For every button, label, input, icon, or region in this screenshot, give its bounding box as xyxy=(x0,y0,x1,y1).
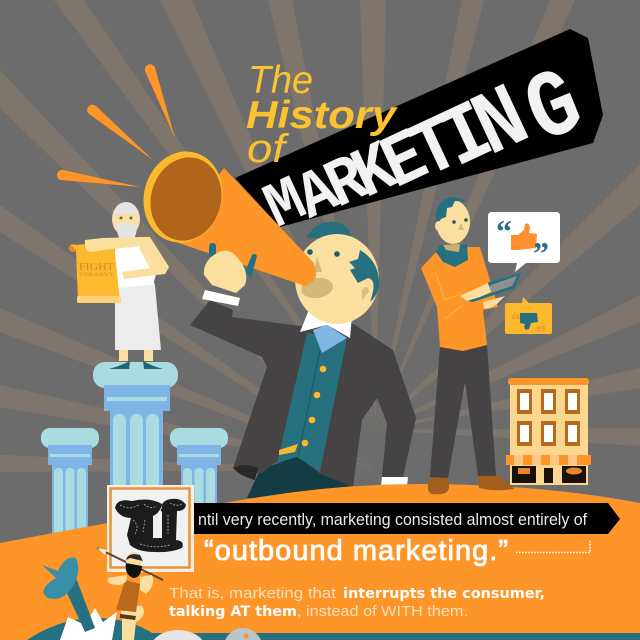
person: man with tablet xyxy=(421,197,521,494)
body text xyxy=(169,585,545,620)
banner: MARKETING: K xyxy=(341,129,410,218)
banner: MARKETING: I xyxy=(427,84,508,190)
speech bubble: thumbs down: ” xyxy=(536,322,546,344)
column: right small xyxy=(170,428,228,535)
drop cap: ornate letter U xyxy=(107,485,194,572)
black ribbon: ntil very recently, marketing consisted almost entirely of xyxy=(198,510,587,529)
statue: philosopher with scroll xyxy=(69,202,169,369)
banner: MARKETING: G xyxy=(511,50,598,169)
column: centre tall xyxy=(93,362,178,504)
banner: MARKETING: R xyxy=(315,142,380,227)
dotted line xyxy=(516,540,590,552)
banner: MARKETING xyxy=(235,29,603,245)
heading: outbound marketing: “outbound marketing.” xyxy=(204,535,508,567)
body text: That is, marketing that xyxy=(169,585,337,602)
title: The History of: of xyxy=(247,127,289,171)
scroll with text: TYRANNY xyxy=(79,272,114,278)
scroll with text xyxy=(69,243,121,303)
speech bubble: thumbs up: “ xyxy=(496,213,512,249)
building xyxy=(506,378,591,485)
body text: interrupts the consumer, xyxy=(343,586,545,602)
target dart and burst xyxy=(27,558,162,640)
black ribbon xyxy=(190,503,620,534)
title: The History of: History xyxy=(246,94,399,137)
speech bubble: thumbs up xyxy=(488,212,560,272)
scroll with text: FIGHT xyxy=(79,262,114,273)
orange hill background xyxy=(0,484,640,640)
speech bubble: thumbs down xyxy=(505,297,552,344)
title: The History of: The xyxy=(248,59,313,102)
man's hand gripping the megaphone handle xyxy=(202,243,257,306)
title: The History of xyxy=(246,59,399,171)
banner: MARKETING: E xyxy=(370,115,441,209)
banner: MARKETING: T xyxy=(399,101,474,200)
column: left small xyxy=(41,428,99,535)
banner: MARKETING: M xyxy=(254,164,318,245)
megaphone xyxy=(133,142,316,286)
banner: MARKETING: A xyxy=(286,154,350,237)
speech bubble: thumbs up: ” xyxy=(533,235,549,271)
tablet xyxy=(468,273,521,302)
body text: talking AT them xyxy=(169,604,297,620)
caveman with spear xyxy=(97,548,163,640)
person: man in suit shouting xyxy=(190,222,416,498)
speech bubble: thumbs down: “ xyxy=(511,310,521,332)
drop cap: ornate letter U: U xyxy=(128,496,178,564)
teal footer strip xyxy=(150,633,640,640)
banner: MARKETING: N xyxy=(459,68,545,180)
body text: , instead of WITH them. xyxy=(297,603,468,620)
footer medallions xyxy=(150,628,263,640)
icon: megaphone sound lines xyxy=(57,64,175,187)
